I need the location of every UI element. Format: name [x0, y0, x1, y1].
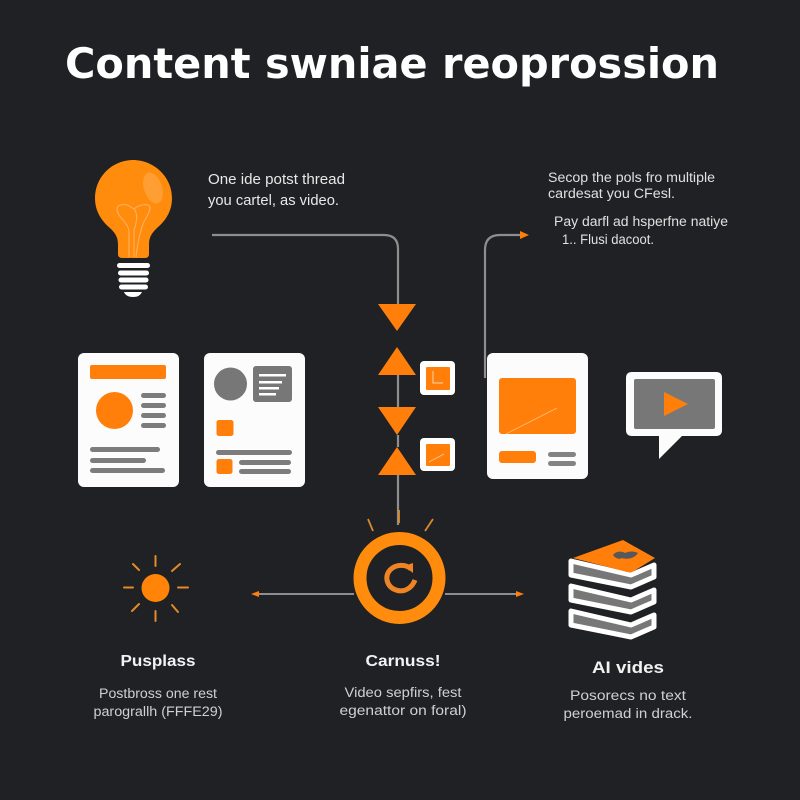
text: top right description: 1.. Flusi dacoot.: [562, 232, 654, 247]
title: Content swniae reoprossion: [65, 39, 719, 88]
connector: horizontal output line: [251, 591, 524, 597]
text: idea description: [208, 172, 345, 209]
label: left column: parograllh (FFFE29): [94, 704, 222, 719]
text: top right description: [548, 170, 728, 247]
card: article layout: [78, 353, 179, 487]
icon: small tile with corner mark: [420, 361, 455, 395]
icon: small tile with slash: [420, 438, 455, 471]
text: top right description: cardesat you CFesl.: [548, 186, 675, 201]
label: right column: [564, 658, 692, 721]
label: centre column: [340, 653, 466, 718]
icon: sun: [124, 556, 188, 621]
connector: idea to triangles: [212, 235, 398, 525]
connector: to video outputs: [485, 231, 529, 378]
icon: video speech bubble: [626, 372, 722, 459]
label: centre column: Video sepfirs, fest: [344, 685, 462, 700]
label: centre column: egenattor on foral): [340, 703, 466, 718]
card: profile layout: [204, 353, 305, 487]
label: left column: [94, 653, 222, 719]
text: idea description: you cartel, as video.: [208, 193, 339, 209]
text: top right description: Secop the pols fro multiple: [548, 170, 715, 185]
label: right column: Posorecs no text: [570, 688, 686, 703]
icon: light bulb: [95, 160, 172, 297]
label: left column: Postbross one rest: [99, 686, 217, 701]
text: top right description: Pay darfl ad hsperfne natiye: [554, 214, 728, 229]
label: left column: Pusplass: [120, 653, 196, 670]
text: idea description: One ide potst thread: [208, 172, 345, 188]
label: right column: AI vides: [592, 658, 664, 677]
label: centre column: Carnuss!: [366, 653, 440, 670]
icon: refresh ring: [360, 510, 439, 618]
card: video post: [487, 353, 588, 479]
icon: layered stack: [571, 540, 655, 637]
label: right column: peroemad in drack.: [564, 706, 692, 721]
icons: orange flow triangles: [378, 304, 416, 475]
